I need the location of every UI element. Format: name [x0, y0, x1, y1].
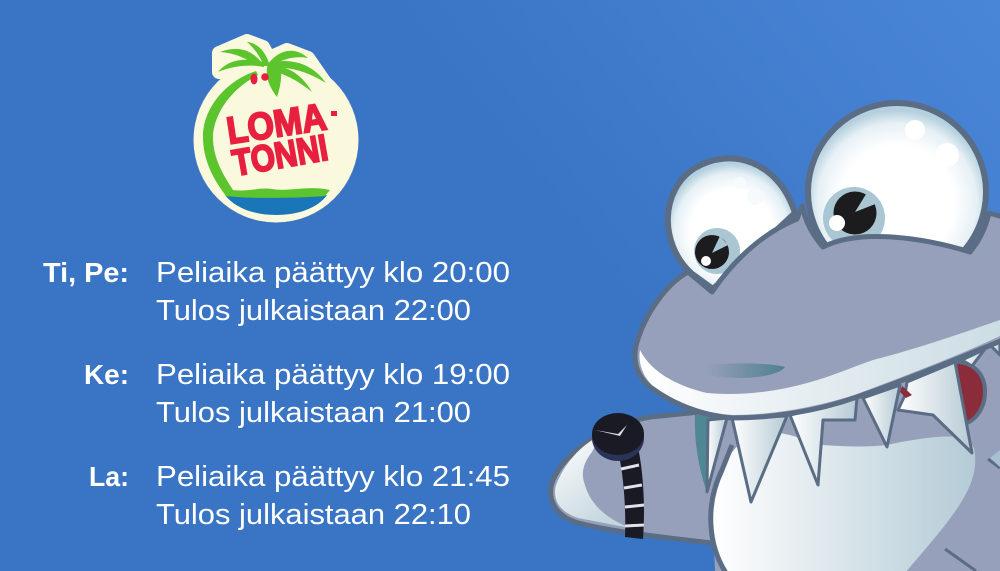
shark teeth — [707, 338, 1000, 502]
logo palm fronds — [218, 42, 326, 97]
logo coconuts — [250, 73, 269, 84]
row: Ke — [84, 359, 510, 429]
shark small eye — [668, 158, 795, 289]
watch strap stripes — [621, 465, 644, 526]
row: Ti, Pe — [43, 257, 510, 327]
row: Ti, Pe: Tulos julkaistaan 22:00 — [156, 295, 471, 327]
logo wave and trunk — [203, 71, 330, 198]
logo cream disc — [194, 58, 358, 222]
row: Ke: Tulos julkaistaan 21:00 — [156, 397, 471, 429]
row: Ke: Ke: — [84, 359, 129, 390]
shark belly — [711, 432, 975, 571]
shark small red gum — [900, 386, 912, 398]
shark mascot — [551, 103, 1000, 571]
logo: Lomatonni — [194, 41, 358, 222]
row: Ke: Peliaika päättyy klo 19:00 — [156, 359, 510, 391]
shark flank highlight — [990, 450, 1000, 467]
shark crease lines — [945, 459, 1000, 571]
shark teal gum — [695, 415, 714, 490]
watch face — [592, 413, 644, 455]
shark big eye — [808, 103, 986, 281]
shark arm — [551, 412, 725, 544]
logo sea — [225, 192, 327, 215]
watch case — [592, 415, 644, 461]
watch hands — [595, 425, 627, 436]
row: La: Tulos julkaistaan 22:10 — [156, 499, 471, 531]
row: Ti, Pe: Peliaika päättyy klo 20:00 — [156, 257, 510, 289]
row: La: La: — [89, 461, 129, 492]
shark nostril — [705, 363, 785, 378]
shark watch — [592, 413, 644, 539]
logo badge backing — [219, 41, 326, 95]
shark lip — [640, 320, 1000, 415]
logo dot — [331, 111, 337, 116]
shark head — [635, 206, 1000, 418]
row: La — [89, 461, 510, 531]
shark mouth red — [955, 362, 985, 424]
schedule text — [43, 257, 510, 531]
logo wordmark LOMA: LOMA — [224, 96, 329, 153]
shark body — [700, 330, 1000, 571]
watch strap — [619, 452, 644, 539]
row: Ti, Pe: Ti, Pe: — [43, 257, 129, 288]
row: La: Peliaika päättyy klo 21:45 — [156, 461, 510, 493]
logo wordmark TONNI: TONNI — [229, 127, 331, 184]
